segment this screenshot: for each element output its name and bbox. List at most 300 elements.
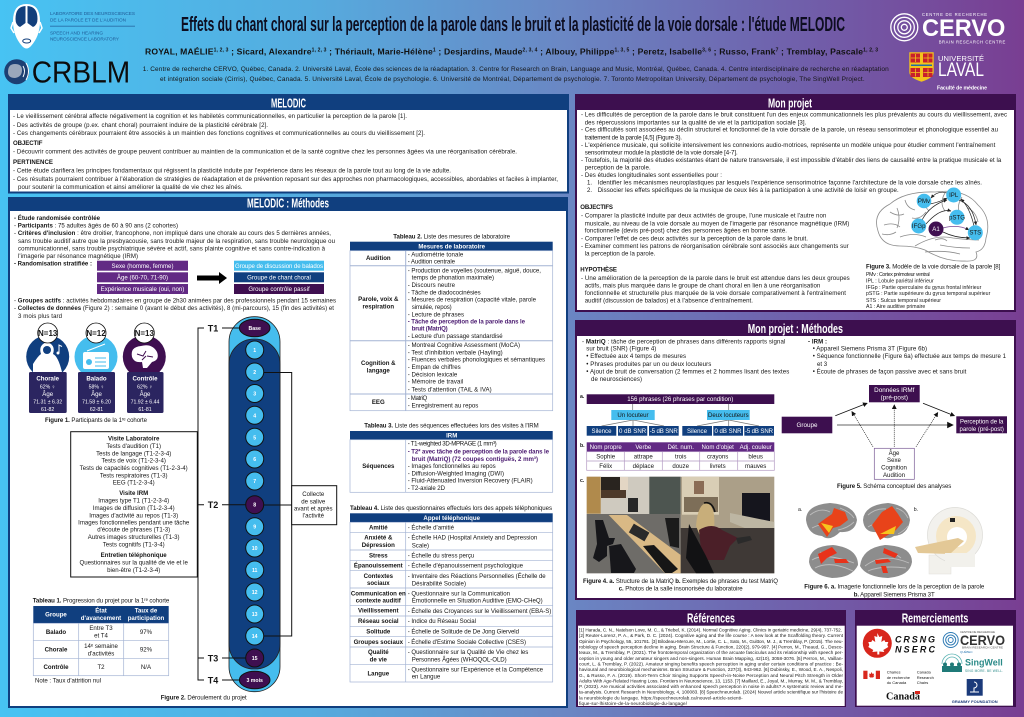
labels: time points: T3 <box>208 654 218 664</box>
text block: introduction <box>13 113 425 137</box>
affiliations: et intégration sociale (Cirris), Québec, Canada. 5. Université Laval, École de psychologie. 6. Université de Montréal, Département de psychologie. 7. Toronto Metropolitan University, Département de psychologie, The SingWell Project. <box>160 74 865 83</box>
authors: ; Thériault, Marie-Hélène <box>327 46 433 56</box>
labels: week numbers: 5 <box>253 435 256 441</box>
text block: context: - L'expérience musicale, qui sollicite intensivement les connexions audio-motrices, représente un modèle unique pour étudier comment l'entraînement <box>581 142 996 149</box>
table 2: laboratory measures: Audition <box>366 255 391 262</box>
text block: study design: - Randomisation stratifiée : <box>14 260 92 268</box>
table 4: telephone questionnaires: - Questionnaire sur l'Expérience et la Compétence <box>408 666 544 673</box>
table 1: project progress: Contrôle <box>43 664 69 671</box>
text block: reference list: Adults With Age-Related Hearing Loss. Frontiers in Neuroscience, 13, 1153. [7] Maillard, E., Joyal, M., Murray, M. M., & Tremblay, <box>579 678 843 683</box>
table 4: telephone questionnaires: Tableau 4. Liste des questionnaires effectués lors des appels téléphoniques <box>350 505 552 512</box>
network arrows <box>922 192 976 238</box>
table 4: telephone questionnaires: Amitié <box>369 524 388 531</box>
group: chorale: Chorale <box>36 376 60 383</box>
labels: week numbers: 1 <box>253 348 256 354</box>
table 3: MRI sequences <box>350 423 553 492</box>
heading: méthodes: Mon projet : Méthodes <box>748 321 843 336</box>
table 2: laboratory measures: temps de phonation maximale) <box>412 275 494 282</box>
table 2: laboratory measures: - Audition centrale <box>408 259 456 266</box>
logo: Canada Research Chairs: Canada <box>917 670 931 674</box>
logo: speech and hearing neuroscience laboratory <box>11 4 135 48</box>
figure 5: conceptual analysis diagram: Groupe <box>796 422 818 429</box>
text block: MatriQ: sur bruit (SNR) (Figure 4) <box>586 345 656 352</box>
group: chorale: 61-82 <box>41 407 54 413</box>
logo: CRSNG NSERC: CRSNG <box>895 634 935 644</box>
text block: reference list: ception in young and older amateur singers and non-singers. Human Brain Mapping, 42(10), 3058-3076. [5] Perron, M., Vaillan- <box>579 656 843 661</box>
table 2: laboratory measures: respiration <box>363 304 394 310</box>
text block: objectifs: - Examiner comment les patrons de réorganisation cérébrale sont associés aux changements sur <box>581 243 849 250</box>
caption: figure 1: Figure 1. Participants de la 1ʳᵉ cohorte <box>45 417 148 424</box>
table 3: MRI sequences: - T2* avec tâche de perception de la parole dans le <box>408 449 550 456</box>
text block: reference list: court, L. & Tremblay, P. (2022). Amateur singing benefits speech perception in aging under certain conditions of practice : Be- <box>579 662 843 666</box>
figure 6: fMRI and scanner: b. <box>914 507 918 513</box>
logo: Université Laval: LAVAL <box>938 60 984 81</box>
node labels: IFGp <box>912 223 926 230</box>
text block: pertinence: - Ces résultats pourraient contribuer à l'élaboration de stratégies de réadaptation et de prévention reposant sur des approches non pharmacologiques, accessibles, abordables et faciles à implanter, <box>13 176 558 183</box>
diagram: MatriQ structure: Un locuteur <box>617 412 649 419</box>
table 1: project progress: Note : Taux d'attrition nul <box>35 678 101 685</box>
caption: figure 6 <box>804 584 985 598</box>
table 4: telephone questionnaires: sociaux <box>367 580 390 587</box>
text block: IRM: - IRM : <box>808 339 827 346</box>
table 3: MRI sequences: Séquences <box>362 463 395 470</box>
labels: week numbers: 10 <box>252 546 258 552</box>
text block: IRM: et 3 <box>817 361 828 368</box>
group: contrôle: N=13 <box>135 329 155 338</box>
labels: time points: T1 <box>208 324 218 334</box>
table 4: telephone questionnaires: - Échelle d'Estime Sociale Collective (CSES) <box>408 639 526 646</box>
table: example sentences: Nom propre <box>590 444 622 451</box>
logo: Université Laval: UNIVERSITÉ <box>938 54 984 63</box>
table 2: laboratory measures: simulée, repos) <box>412 304 452 311</box>
table 4: telephone questionnaires: - Échelle d'épanouissement psychologique <box>408 563 524 570</box>
table 4: telephone questionnaires: Scale) <box>412 542 429 549</box>
labels: time points: T2 <box>208 500 218 510</box>
diagram: MatriQ structure: 0 dB SNR <box>714 428 742 435</box>
caption: figure 2: Figure 2. Déroulement du projet <box>161 694 247 701</box>
text block: pertinence: PERTINENCE <box>13 159 53 166</box>
MRI scanner <box>915 508 982 574</box>
text block: MatriQ <box>582 339 789 383</box>
text block: context: - Des études longitudinales sont essentielles pour : <box>581 172 722 179</box>
table 2: laboratory measures: bruit (MatriQ) <box>412 326 448 333</box>
diagram: stratified randomisation: Expérience musicale (oui, non) <box>101 286 184 293</box>
logo: Canada Research Chairs: Chaires <box>887 670 900 674</box>
table: example sentences: trois <box>675 454 686 460</box>
authors: ; Russo, Frank <box>711 46 776 56</box>
panel: mon projet méthodes <box>575 320 1016 600</box>
figure 6: fMRI and scanner <box>798 503 985 598</box>
table: example sentences: Dét. num. <box>667 444 694 451</box>
authors: 1, 2, 3 <box>312 48 327 54</box>
text block: objectif: OBJECTIF <box>13 140 43 147</box>
labels: week numbers: 4 <box>253 413 256 419</box>
table 2: laboratory measures: - Montreal Cognitive Assessment (MoCA) <box>408 342 520 349</box>
legend: abbreviations: STS : Sulcus temporal supérieur <box>866 298 941 304</box>
labels: week numbers: Base <box>248 326 261 332</box>
logo: CRBLM: CRBLM <box>32 54 130 90</box>
table 4: telephone questionnaires: Émotionnelle en Situation Auditive (EMO-CHeQ) <box>412 598 543 605</box>
text block: hypothèse: - Une amélioration de la perception de la parole dans le bruit est attendue dans les deux groupes <box>581 275 850 282</box>
panel: MELODIC méthodes <box>8 196 568 708</box>
figure 5: conceptual analysis diagram: Âge <box>889 450 900 457</box>
node labels: IPL <box>949 192 959 199</box>
table 4: telephone questionnaires: Qualité <box>368 649 389 656</box>
logo: speech and hearing neuroscience laboratory: SPEECH AND HEARING <box>50 30 103 35</box>
callout: saliva collection: Collecte <box>302 491 325 498</box>
labels: week numbers: 3 mois <box>246 678 263 684</box>
timeline: weekly sessions <box>239 319 270 689</box>
callout: visit contents: Tests d'audition (T1) <box>106 443 161 450</box>
text block: introduction: - Des activités de groupe (p.ex. chant choral) pourraient induire de la plasticité cérébrale [2]. <box>13 122 268 129</box>
table 4: telephone questionnaires: - Échelle des Croyances sur le Vieillissement (EBA-S) <box>408 608 551 615</box>
text block: IRM: • Séquence fonctionnelle (Figure 6a) effectuée aux temps de mesure 1 <box>813 353 1007 360</box>
group: contrôle <box>123 323 166 413</box>
text block: reference list: la neurobiologie du langage. https://speechneurolab.ca/nouvel-article-scienti- <box>579 695 743 700</box>
logo: CERVO partner: CERVO <box>960 632 1005 648</box>
legend: abbreviations: IFGp : Partie operculaire du gyrus frontal inférieur <box>866 285 982 291</box>
group: balado: Âge <box>91 391 103 398</box>
table 4: telephone questionnaires: - Questionnaire sur la Qualité de Vie chez les <box>408 649 528 656</box>
logo: Université Laval <box>909 52 987 92</box>
figure 4: MatriQ structure and lab <box>580 394 778 592</box>
text block: objectif: - Découvrir comment des activités de groupe peuvent contribuer au maintien de la communication et de la santé cognitive chez les personnes âgées via une réorganisation cérébrale. <box>13 148 517 155</box>
callout: visit contents: Images fonctionnelles pendant une tâche <box>78 520 190 527</box>
diagram: MatriQ structure: 0 dB SNR <box>619 428 647 435</box>
diagram: stratified randomisation: Groupe contrôle passif <box>248 286 310 293</box>
table 4: telephone questionnaires: - Indice du Réseau Social <box>408 618 476 625</box>
text block: context: traitement de la parole [4,5] (Figure 3). <box>585 134 682 141</box>
diagram: MatriQ structure: Deux locuteurs <box>708 412 749 419</box>
logo: Grammy Foundation: GRAMMY FOUNDATION <box>952 699 998 704</box>
node labels: A1 <box>932 226 940 233</box>
group: chorale <box>26 323 69 413</box>
text block: context: - Les difficultés de perception de la parole dans le bruit constituent l'un des enjeux communicationnels les plus prévalents au cours du vieillissement, avec <box>581 112 1007 119</box>
diagram: MatriQ structure: Silence <box>592 428 612 435</box>
figure 5: conceptual analysis diagram: parole (pré-post) <box>960 427 1004 433</box>
logo: speech and hearing neuroscience laboratory: DE LA PAROLE ET DE L'AUDITION <box>50 18 126 23</box>
figure 3: dorsal pathway model <box>866 188 1001 310</box>
text block: hypothèse: HYPOTHÈSE <box>580 265 617 273</box>
table: example sentences <box>580 442 774 470</box>
table 4: telephone questionnaires: Communication en <box>351 591 406 598</box>
table 2: laboratory measures: langage <box>367 368 390 374</box>
node labels: pSTG <box>949 214 965 221</box>
text block: reference list: P. (2023). Are musical activities associated with enhanced speech perception in noise in adults? A systematic review and me- <box>579 684 843 689</box>
text block: active groups: - Collectes de données (Figure 2) : semaine 0 (avant le début des activités), 8 (mi-parcours), 15 (fin des activités) et <box>14 305 334 312</box>
group: balado <box>74 323 118 413</box>
text block: reference list: Opinion in Psychology, 55, 101781. [3] Bilodeau-Mercure, M., Lortie, C. L., Sato, M., Guitton, M. J., & Tremblay, P. (2015). The neu- <box>579 639 843 644</box>
table 3: MRI sequences: - Fluid-Attenuated Inversion Recovery (FLAIR) <box>408 478 533 485</box>
text block: objectifs: la perception de la parole. <box>585 251 656 258</box>
diagram: stratified randomisation: Âge (60-70, 71-90) <box>117 274 168 281</box>
group: contrôle: 71.92 ± 6.44 <box>131 400 160 406</box>
labels: week numbers: 7 <box>253 479 256 485</box>
table 2: laboratory measures: - Décision lexicale <box>408 371 458 378</box>
legend: abbreviations <box>866 272 991 310</box>
table 3: MRI sequences: Tableau 3. Liste des séquences effectuées lors des visites à l'IRM <box>364 423 539 430</box>
table 2: laboratory measures: Mesures de laboratoire <box>418 244 486 250</box>
text block: MatriQ: • Effectuée aux 4 temps de mesures <box>586 353 686 360</box>
group: balado: 62-81 <box>90 407 103 413</box>
table 3: MRI sequences: IRM <box>446 433 457 440</box>
table 1: project progress: Groupe <box>45 612 67 619</box>
labels: week numbers: 8 <box>253 503 256 509</box>
text block: MatriQ: - MatriQ : tâche de perception de phrases dans différents rapports signal <box>582 339 785 346</box>
labels: week numbers: 3 <box>253 392 256 398</box>
logo: CERVO: CERVO <box>922 15 1005 42</box>
group: contrôle: 61-81 <box>138 407 152 413</box>
table: example sentences: déplace <box>633 463 655 470</box>
table: example sentences: bleus <box>748 454 763 460</box>
table 4: telephone questionnaires: Anxiété & <box>364 535 393 542</box>
logo: speech and hearing neuroscience laboratory: NEUROSCIENCE LABORATORY <box>50 36 120 42</box>
authors: 1, 2, 3 <box>863 48 878 54</box>
table 2: laboratory measures: - Mesures de respiration (capacité vitale, parole <box>408 297 537 304</box>
table 4: telephone questionnaires <box>350 505 553 682</box>
table 1: project progress: et T4 <box>94 632 108 640</box>
figure 5: conceptual analysis diagram: (pré-post) <box>881 394 908 401</box>
text block: study design: - Participants : 75 adultes âgés de 60 à 90 ans (2 cohortes) <box>14 223 178 230</box>
diagram: MatriQ structure: a. <box>580 394 585 400</box>
callout: saliva collection: l'activité <box>303 513 325 520</box>
logo: CERVO partner <box>943 630 1005 654</box>
table 2: laboratory measures: - Lecture d'un passage standardisé <box>408 333 503 340</box>
text block: pertinence <box>13 159 558 191</box>
table 4: telephone questionnaires: Appel téléphonique <box>423 515 481 522</box>
callout: visit contents: Images d'activité au repos (T1-3) <box>89 512 178 519</box>
table 4: telephone questionnaires: Groupes sociaux <box>354 639 404 646</box>
table 1: project progress: Taux de <box>135 608 158 614</box>
callout: visit contents: Tests respiratoires (T1-3) <box>100 472 168 479</box>
table 2: laboratory measures: - Tests d'attention (TAiL & IVA) <box>408 386 492 393</box>
text block: study design: communicationnel, sans trouble psychiatrique sévère et actif, sans plainte cognitive et sans contre-indication à <box>18 246 326 252</box>
group: balado: Balado <box>86 376 107 383</box>
logo: CERVO partner: QUÉBEC <box>960 649 974 654</box>
group: chorale: 62% ♀ <box>40 385 56 391</box>
table 2: laboratory measures: - Mémoire de travail <box>408 379 463 386</box>
panel: références <box>576 610 846 707</box>
table: example sentences: Félix <box>599 463 612 470</box>
labels: week numbers <box>246 326 263 684</box>
authors: ; Albouy, Philippe <box>538 46 615 56</box>
logo: CERVO partner: BRAIN RESEARCH CENTRE <box>962 646 1003 650</box>
text block: study design: - Critères d'inclusion : être droitier, francophone, non impliqué dans une chorale au cours des 5 dernières années, <box>14 230 331 237</box>
labels: week numbers: 6 <box>253 457 256 463</box>
table 4: telephone questionnaires: - Échelle d'amitié <box>408 524 455 531</box>
authors: 3, 6 <box>702 48 711 54</box>
logo: speech and hearing neuroscience laboratory: LABORATOIRE DES NEUROSCIENCES <box>50 11 135 16</box>
table 2: laboratory measures: - Empan de chiffres <box>408 364 461 371</box>
figure 1: participants <box>26 323 166 424</box>
logo: CERVO: CENTRE DE RECHERCHE <box>922 12 987 17</box>
logo: Canada Research Chairs: Research <box>917 675 934 680</box>
text block: reference list: ta-analysis. Current Research in Neurobiology, 4, 100083. [8] Speechneurolab. (2024) Nouvel article scientifique sur l'histoire de <box>579 690 843 695</box>
authors: 2, 3, 4 <box>523 48 538 54</box>
legend: abbreviations: pSTG : Partie supérieure du gyrus temporal supérieur <box>866 291 991 297</box>
table 2: laboratory measures: - Enregistrement au repos <box>408 403 478 410</box>
text block: IRM: • Appareil Siemens Prisma 3T (Figure 6b) <box>813 345 927 352</box>
table 4: telephone questionnaires: Épanouissement <box>354 562 403 570</box>
labels: week numbers: 14 <box>252 634 258 640</box>
callout: visit contents: Visite Laboratoire <box>108 436 160 443</box>
table 2: laboratory measures: EEG <box>372 399 385 406</box>
table 2: laboratory measures: - Lecture de phrases <box>408 311 464 318</box>
text block: objectifs <box>580 204 849 258</box>
callout: visit contents: Images de diffusion (T1-2-3-4) <box>93 505 175 512</box>
text block: reference list: robiology of speech perception decline in aging. Brain Structure & Function, 220(2), 979-997. [4] Perron, M., Theaud, G., Desco- <box>579 644 843 650</box>
table 4: telephone questionnaires: - Échelle du stress perçu <box>408 552 474 559</box>
node labels: PMv <box>918 198 931 205</box>
callout: visit contents: Tests de voix (T1-2-3-4) <box>102 458 166 465</box>
diagram: MatriQ structure: -5 dB SNR <box>650 428 678 435</box>
callout: saliva collection <box>292 486 337 525</box>
text block: hypothèse: auditif (discussion de balados) et à l'absence d'entraînement. <box>585 298 753 305</box>
text block: reference list <box>579 628 844 706</box>
diagram: MatriQ structure: Silence <box>687 428 708 435</box>
text block: context: sensorimoteur module la plasticité de la voie dorsale [4-7]. <box>585 149 738 156</box>
authors: 7 <box>776 48 779 54</box>
figure 5: conceptual analysis diagram: Cognition <box>881 465 907 472</box>
callout: saliva collection: avant et après <box>294 506 333 513</box>
text block: hypothèse: fonctionnelle et structurelle plus marquée de la voie dorsale comparativement à l'entraînement <box>585 290 846 297</box>
table 1: project progress <box>33 598 170 685</box>
text block: context: 1. <box>587 180 592 187</box>
figure 6: fMRI and scanner: a. <box>798 507 802 513</box>
text block: reference list: [1] Harada, C. N., Natelson Love, M. C., & Triebel, K. (2014). Normal Cognitive Aging. Clinics in geriatric medicine, 29(4), 737-752. <box>579 628 842 632</box>
table 3: MRI sequences: - T1-weighted 3D-MPRAGE (1 mm³) <box>408 440 497 447</box>
callout: visit contents: Tests de capacités cognitives (T1-2-3-4) <box>80 465 188 472</box>
text block: objectifs: OBJECTIFS <box>580 204 613 211</box>
text block: MatriQ: • Ajout de bruit de conversation (2 femmes et 2 hommes lisant des textes <box>586 369 789 376</box>
table: example sentences: attrape <box>634 454 653 460</box>
logo: Grammy Foundation <box>952 679 998 704</box>
legend: abbreviations: PMv : Cortex prémoteur ventral <box>866 272 930 278</box>
text block: hypothèse <box>580 265 850 305</box>
table: example sentences: Adj. couleur <box>740 444 772 451</box>
table 1: project progress: 92% <box>140 646 153 654</box>
labels: week numbers: 12 <box>252 590 258 596</box>
table 1: project progress: d'activités <box>88 650 114 658</box>
table: example sentences: livrets <box>710 463 726 470</box>
text block: study design <box>14 214 335 268</box>
table 1: project progress: 14ᵉ semaine <box>84 643 118 650</box>
logo: Canada Research Chairs: de recherche <box>887 675 911 680</box>
logo: CRSNG NSERC <box>863 629 936 658</box>
labels: week numbers: 13 <box>252 612 258 618</box>
heading: MELODIC: MELODIC <box>271 96 306 110</box>
table 3: MRI sequences: bruit (MatriQ) (72 coupes contiguës, 2 mm³) <box>412 456 538 463</box>
text block: context: des répercussions importantes sur la qualité de vie et la participation sociale [3]. <box>585 119 807 126</box>
group: contrôle: 62% ♀ <box>137 385 153 391</box>
logo: CERVO: BRAIN RESEARCH CENTRE <box>939 40 1006 44</box>
panel: MELODIC <box>8 94 569 194</box>
table: example sentences: Sophie <box>596 454 616 460</box>
text block: IRM <box>808 339 1007 376</box>
logo: SingWell <box>942 654 1003 673</box>
table 2: laboratory measures: - Tâche de perception de la parole dans le <box>408 319 526 326</box>
logo: CRSNG NSERC: NSERC <box>895 644 936 654</box>
table 2: laboratory measures: Cognition & <box>361 360 396 367</box>
table 4: telephone questionnaires: Dépression <box>362 542 395 549</box>
figure 5: conceptual analysis diagram: Audition <box>883 472 905 479</box>
legend: abbreviations: IPL : Lobule pariétal inférieur <box>866 278 934 284</box>
table 2: laboratory measures: - Production de voyelles (soutenue, aiguë, douce, <box>408 268 541 275</box>
table 1: project progress: Balado <box>46 629 66 636</box>
table: example sentences: Verbe <box>635 444 652 451</box>
diagram: stratified randomisation: Groupe de discussion de balados <box>235 263 323 270</box>
authors: ; Sicard, Alexandre <box>229 46 312 56</box>
table 3: MRI sequences: - Diffusion-Weighted Imaging (DWI) <box>408 470 504 477</box>
caption: figure 4: c. Photos de la salle insonorisée du laboratoire <box>619 585 743 592</box>
heading: références: Références <box>687 610 735 626</box>
logo: Canada wordmark: Canada <box>886 692 921 702</box>
table 2: laboratory measures: - MatriQ <box>408 395 428 402</box>
callout: visit contents: Tests cognitifs (T1-3-4) <box>103 541 165 548</box>
table 4: telephone questionnaires: Vieillissement <box>358 608 399 615</box>
table: example sentences: crayons <box>707 454 728 460</box>
callout: visit contents: bien-être (T1-2-3-4) <box>107 567 160 574</box>
diagram: MatriQ structure: 156 phrases (26 phrases par condition) <box>627 396 733 403</box>
group: contrôle: Contrôle <box>132 376 158 383</box>
panel: mon projet <box>575 94 1016 312</box>
table 4: telephone questionnaires: Réseau social <box>358 618 399 625</box>
table 2: laboratory measures: - Discours neutre <box>408 282 456 289</box>
text block: pertinence: pour soutenir la communication et ainsi améliorer la qualité de vie chez les aînés. <box>18 184 243 191</box>
text block: active groups <box>14 298 336 320</box>
legend: abbreviations: A1 : Aire auditive primaire <box>866 304 925 310</box>
table 2: laboratory measures: - Fluences verbales phonologiques et sémantiques <box>408 357 545 364</box>
group: chorale: N=13 <box>38 329 58 338</box>
logo: Canada Research Chairs <box>863 670 934 685</box>
callout: visit contents: d'écoute de phrases (T1-3) <box>97 527 170 534</box>
table 1: project progress: 97% <box>140 629 153 636</box>
text block: reference list: fique-sur-lhistoire-de-la-neurobiologie-du-langage/ <box>579 701 688 706</box>
logo: CERVO partner: CENTRE DE RECHERCHE <box>960 630 995 634</box>
callout: visit contents <box>71 432 197 577</box>
table 1: project progress: État <box>95 606 107 614</box>
callout: saliva collection: de salive <box>301 498 326 505</box>
photo: participant in booth <box>681 477 774 573</box>
table 1: project progress: N/A <box>141 664 152 671</box>
text block: objectifs: fonctionnelle (devis pré-post) chez des personnes âgées en bonne santé. <box>585 228 787 235</box>
callout: visit contents: Visite IRM <box>119 490 148 497</box>
brain outline <box>876 191 988 261</box>
authors: 1, 2, 3 <box>214 48 229 54</box>
text block: context: Dissocier les effets spécifiques de la musique de ceux liés à la participation à une activité de loisir en groupe. <box>598 187 899 194</box>
caption: figure 4: Figure 4. a. Structure de la MatriQ b. Exemples de phrases du test MatriQ <box>583 578 778 585</box>
text block: context: 2. <box>587 187 592 194</box>
authors: ; Tremblay, Pascale <box>779 46 863 56</box>
table 4: telephone questionnaires: de vie <box>370 656 388 663</box>
table 4: telephone questionnaires: - Inventaire des Réactions Personnelles (Échelle de <box>408 573 546 580</box>
callout: visit contents: Images type T1 (T1-2-3-4) <box>98 498 169 505</box>
text block: introduction: - Ces changements cérébraux pourraient être associés à un maintien des fonctions cognitives et communicationnelles au cours du vieillissement [2]. <box>13 130 425 137</box>
callout: visit contents: EEG (T1-2-3-4) <box>113 479 155 486</box>
text block: context: perception de la parole. <box>585 164 651 171</box>
figure 2: project timeline <box>71 317 337 701</box>
text block: introduction: - Le vieillissement cérébral affecte négativement la cognition et les habiletés communicationnelles, en particulier la perception de la parole [1]. <box>13 113 407 120</box>
logo: CERVO <box>891 12 1006 44</box>
caption: figure 4 <box>583 578 778 592</box>
labels: week numbers: 15 <box>252 656 258 662</box>
diagram: MatriQ structure <box>580 394 774 436</box>
table 2: laboratory measures: Tableau 2. Liste des mesures de laboratoire <box>393 234 511 241</box>
caption: figure 6: Figure 6. a. Imagerie fonctionnelle lors de la perception de la parole <box>804 584 985 591</box>
figure 4: MatriQ structure and lab: c. <box>580 478 585 484</box>
diagram: MatriQ structure: -5 dB SNR <box>745 428 774 435</box>
text block: study design: l'imagerie par résonance magnétique (IRM) <box>18 253 138 260</box>
